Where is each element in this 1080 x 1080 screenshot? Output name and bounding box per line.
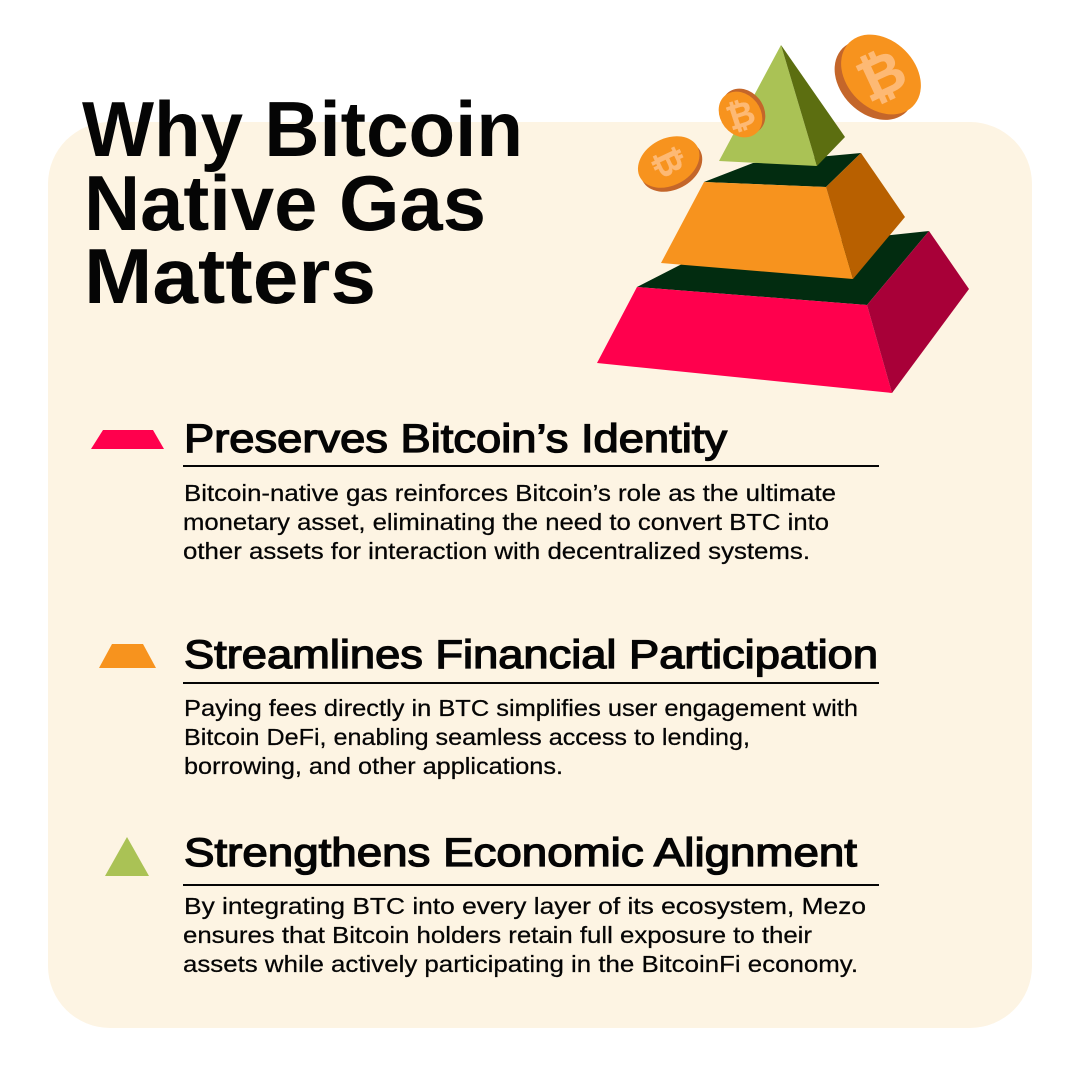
bottom tier: red	[597, 231, 969, 393]
icon: green triangle	[105, 837, 149, 876]
coin: small	[710, 80, 774, 146]
title	[82, 85, 523, 320]
body text: ensures that Bitcoin holders retain full exposure to their	[183, 922, 812, 948]
body text: Paying fees directly in BTC simplifies user engagement with	[184, 695, 858, 721]
body text: assets while actively participating in the BitcoinFi economy.	[183, 951, 858, 977]
middle tier: orange	[661, 153, 905, 279]
coin: small: ₿	[722, 93, 760, 139]
icon: orange trapezoid	[99, 644, 156, 668]
body text	[184, 695, 858, 779]
top tier: green	[719, 45, 845, 166]
body text	[183, 480, 836, 564]
panel: cream background	[48, 122, 1032, 1028]
coin: left: ₿	[644, 141, 692, 183]
section: Strengthens Economic Alignment	[105, 831, 879, 977]
title: Native Gas	[84, 159, 486, 247]
pyramid illustration with coins	[597, 19, 969, 393]
section: Streamlines Financial Participation	[99, 633, 879, 779]
title: Why Bitcoin	[82, 85, 523, 173]
body text: By integrating BTC into every layer of its ecosystem, Mezo	[184, 893, 866, 919]
coin: large: ₿	[847, 37, 916, 115]
body text: Bitcoin-native gas reinforces Bitcoin’s role as the ultimate	[184, 480, 836, 506]
icon: red trapezoid	[91, 430, 164, 449]
coin: left	[629, 126, 711, 202]
body text: monetary asset, eliminating the need to convert BTC into	[183, 509, 829, 535]
heading: Streamlines Financial Participation	[184, 633, 878, 677]
body text	[183, 893, 866, 977]
body text: other assets for interaction with decentralized systems.	[183, 538, 810, 564]
body text: Bitcoin DeFi, enabling seamless access to lending,	[184, 724, 750, 750]
section: Preserves Bitcoin's Identity	[91, 417, 879, 564]
heading: Preserves Bitcoin’s Identity	[184, 417, 727, 461]
heading: Strengthens Economic Alignment	[184, 831, 857, 875]
title: Matters	[84, 232, 376, 320]
body text: borrowing, and other applications.	[184, 753, 563, 779]
coin: large	[819, 19, 937, 136]
